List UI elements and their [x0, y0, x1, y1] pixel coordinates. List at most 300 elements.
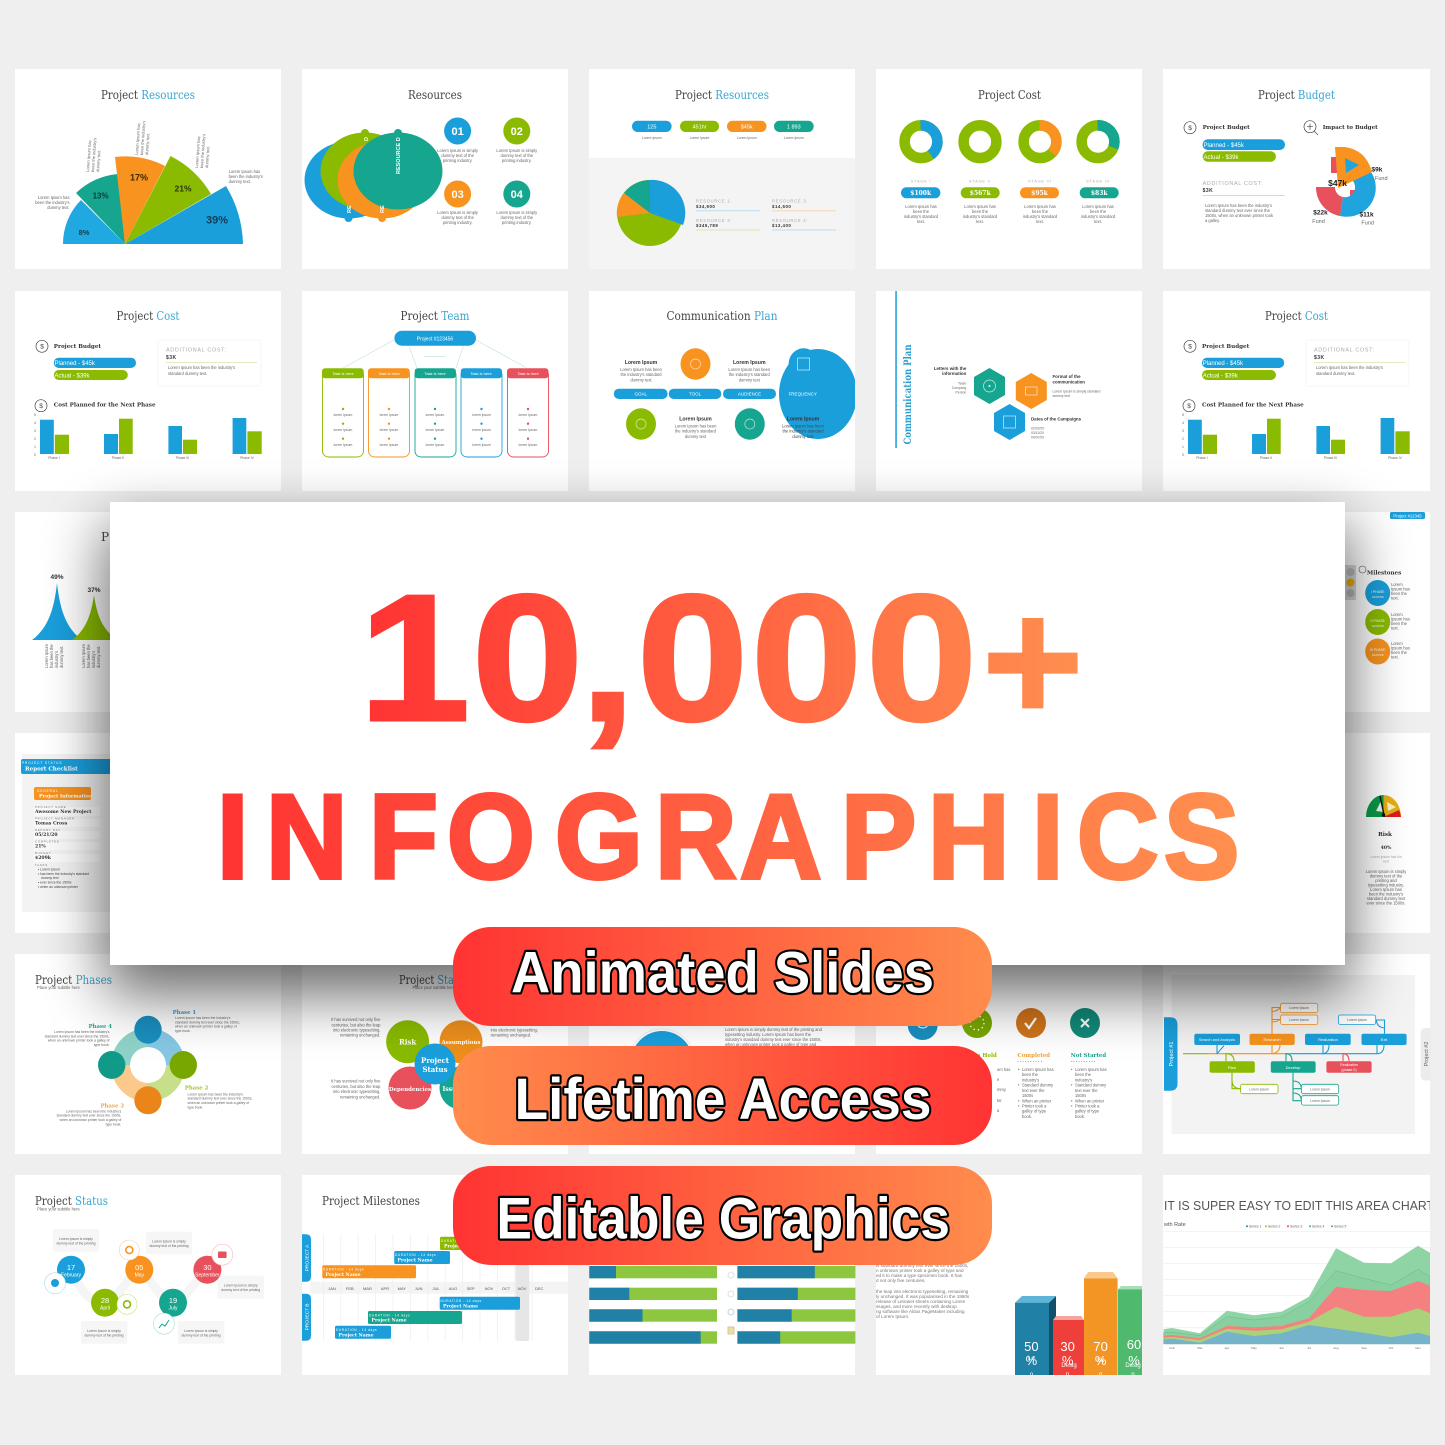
panel: project flow timeline slide — [1163, 954, 1431, 1154]
project information fields — [34, 805, 100, 889]
flow sub boxes — [1241, 1003, 1376, 1105]
resource figures: $14,500 — [772, 204, 791, 209]
body text, clipped at slide edge: ng software like Aldus PageMaker including — [876, 1309, 965, 1314]
month labels: JUL — [432, 1286, 440, 1291]
chart annotation labels: been the industry's — [90, 138, 97, 172]
date circles: 28 — [101, 1296, 109, 1305]
3d bars: n — [1131, 1372, 1135, 1378]
3d bars: Desig — [1125, 1363, 1141, 1369]
task columns: lorem Ipsum — [334, 413, 353, 417]
phase captions: type book. — [106, 1122, 121, 1126]
area chart: Jul — [1307, 1346, 1311, 1350]
date circles: 17 — [67, 1263, 75, 1272]
cost planned bar chart — [34, 400, 262, 460]
hexagon captions: 03/11/20 — [1031, 431, 1044, 435]
3d bars: % — [1095, 1353, 1107, 1368]
plan pills: TOOL — [689, 392, 702, 397]
hexagon captions: Team — [958, 382, 966, 386]
numbered items 01 to 04: dummy text of the — [441, 153, 475, 158]
chart annotation labels — [35, 121, 263, 210]
numbered items 01 to 04: printing industry. — [443, 158, 473, 163]
status column: completed: galley of type — [1022, 1109, 1047, 1114]
milestone phases: I PHASE — [1371, 590, 1385, 594]
flow stage boxes: Research — [1263, 1037, 1281, 1042]
plan labels: Lorem Ipsum has been — [620, 367, 663, 372]
polar area chart: 39% — [206, 214, 228, 226]
status icons — [908, 1008, 1100, 1040]
text cards: dummy text of the printing — [84, 1334, 124, 1338]
overlapping resource circles: D — [364, 137, 370, 141]
task columns: lorem Ipsum — [380, 428, 399, 432]
task columns: lorem Ipsum — [472, 443, 491, 447]
text cards: Lorem Ipsum is simply — [224, 1284, 258, 1288]
panel: project status bubbles slide — [302, 954, 568, 1154]
status paragraph: Lorem Ipsum is simply dummy text of the printing and — [725, 1027, 823, 1032]
date circles: February — [61, 1272, 81, 1278]
flow stage boxes: (phase II) — [1341, 1068, 1357, 1072]
panel: project phases slide — [15, 954, 281, 1154]
plan pills: GOAL — [634, 392, 647, 397]
project information fields: 05/21/20 — [35, 832, 58, 838]
peak chart — [32, 574, 118, 668]
heading: project cost: Project Cost — [978, 88, 1041, 102]
chart subtitle and legend: Series 2 — [1268, 1224, 1281, 1228]
impact to budget radial chart: Impact to Budget — [1323, 125, 1378, 131]
panel: project resources polar chart slide — [15, 69, 281, 269]
cost planned bar chart: 5 — [1182, 413, 1184, 417]
status column: completed: • — [1018, 1098, 1020, 1103]
panel: stacked progress bars slide — [589, 1175, 855, 1375]
chart annotation labels: Lorem Ipsum has — [229, 169, 260, 174]
risk labels: text — [1383, 860, 1389, 864]
status column: completed: 1500s — [1022, 1093, 1033, 1098]
task columns: Task is here — [517, 371, 539, 376]
additional cost card: standard dummy text. — [1316, 371, 1355, 376]
metric pills: 125 — [647, 124, 656, 130]
chart annotation labels: Lorem Ipsum has — [194, 136, 201, 168]
phase captions: Lorem Ipsum has been the industry's — [66, 1109, 122, 1113]
status bubbles: Project — [421, 1056, 450, 1065]
additional cost card: ADDITIONAL COST: — [166, 348, 227, 354]
project information fields: dummy text — [41, 876, 59, 880]
left progress bars — [589, 1266, 717, 1344]
resource figures: RESOURCE 1: — [696, 198, 732, 204]
area chart: Apr — [1225, 1346, 1229, 1350]
flow stage boxes: Search and Analysis — [1199, 1037, 1235, 1042]
milestone phases: Ipsum has — [1391, 646, 1410, 650]
project information fields: • Lorem Ipsum — [38, 868, 60, 872]
status paragraph: typesetting industry. Lorem Ipsum has been the — [725, 1032, 812, 1037]
chart subtitle and legend: wth Rate — [1163, 1222, 1186, 1228]
stage columns: text. — [917, 219, 925, 224]
status column: in progress — [974, 1053, 1010, 1113]
hexagon captions: Lorem Ipsum is simply standard — [1052, 390, 1100, 394]
impact to budget radial chart: Fund — [1375, 176, 1388, 182]
phase captions: Phase 1 — [173, 1010, 196, 1016]
date circles: May — [135, 1272, 145, 1278]
phase captions: when an unknown printer took a galley of — [60, 1118, 121, 1122]
plan labels: Lorem Ipsum — [625, 360, 658, 366]
stage columns: industry's standard — [1023, 214, 1058, 219]
hexagon captions: 02/02/20 — [1031, 426, 1044, 430]
polar area chart: 17% — [130, 172, 148, 182]
gantt bars: DURATION - 14 days — [395, 1253, 436, 1257]
3d bars: Desig — [1061, 1363, 1077, 1369]
status column: in progress: a — [997, 1108, 1000, 1113]
stage columns: Lorem Ipsum has — [1024, 204, 1056, 209]
panel: project cost bars slide — [15, 291, 281, 491]
stage columns: been the — [1032, 209, 1049, 214]
chart annotation labels: Lorem Ipsum has — [38, 195, 70, 200]
status column: not started: • — [1071, 1103, 1073, 1108]
month labels: MAY — [398, 1286, 406, 1291]
additional cost card: ADDITIONAL COST: — [1314, 348, 1375, 354]
task columns: lorem Ipsum — [426, 443, 445, 447]
panel: peaks chart slide, left slice — [15, 512, 135, 712]
metric pills — [632, 121, 814, 140]
impact to budget radial chart: $47k — [1328, 178, 1347, 188]
phase captions: Lorem Ipsum has been the industry's — [54, 1030, 110, 1034]
status text blocks: remaining unchanged. — [491, 1033, 531, 1038]
panel: peaks chart slide, left slice: P — [101, 530, 109, 544]
3d bars — [1015, 1272, 1142, 1378]
month labels: OCT — [502, 1286, 511, 1291]
status text blocks: centuries, but also the leap — [331, 1084, 381, 1089]
numbered items 01 to 04 — [437, 118, 538, 225]
feature pill: editable graphics — [453, 1166, 992, 1265]
status column: completed: • — [1018, 1103, 1020, 1108]
peak chart: dummy text. — [59, 646, 64, 668]
status column: completed: been the — [1022, 1072, 1039, 1077]
phase captions: Phase 3 — [100, 1104, 124, 1110]
metric pills: 1 893 — [787, 124, 801, 130]
month labels: NOV — [485, 1286, 494, 1291]
milestone phases: Ipsum has — [1391, 586, 1410, 592]
tab: project 1 — [1164, 1017, 1178, 1091]
status column: completed: • — [1018, 1083, 1020, 1088]
status column: in progress: mmy — [997, 1087, 1007, 1092]
panel: task status columns slide — [876, 954, 1142, 1154]
hexagon captions: 04/07/20 — [1031, 436, 1044, 440]
status column: not started: When an printer — [1075, 1098, 1105, 1103]
cost planned bar chart: Phase III — [1324, 456, 1337, 460]
chart subtitle and legend: Series 3 — [1290, 1224, 1303, 1228]
status text blocks — [331, 1017, 538, 1099]
numbered items 01 to 04: dummy text of the — [441, 215, 475, 220]
area chart: Aug — [1333, 1346, 1339, 1350]
org connectors — [343, 340, 527, 368]
stage columns: text. — [976, 219, 984, 224]
status column: not started: text ever the — [1075, 1088, 1098, 1093]
status column: in progress: e — [997, 1077, 1000, 1082]
donut charts — [905, 125, 1114, 158]
3d bars: % — [1062, 1353, 1074, 1368]
hexagon captions: Dates of the Campaigns — [1031, 416, 1082, 422]
status text blocks: It has survived not only five — [331, 1079, 381, 1084]
area chart: Jun — [1279, 1346, 1284, 1350]
task columns: lorem Ipsum — [426, 428, 445, 432]
3d bars: % — [1128, 1353, 1140, 1368]
panel: 3d bar chart slide — [876, 1175, 1142, 1378]
status column: in progress: um has — [997, 1067, 1010, 1072]
month labels: DEC — [535, 1286, 544, 1291]
task columns: lorem Ipsum — [426, 413, 445, 417]
task columns: Task is here — [424, 371, 446, 376]
milestone phases: Lorem — [1391, 641, 1403, 646]
stage columns: STAGE II — [969, 178, 991, 184]
stage columns: STAGE I — [911, 178, 931, 184]
stage columns: $83k — [1091, 190, 1108, 197]
status column: not started: 1500s — [1075, 1093, 1086, 1098]
milestone phases: 01/07/09 — [1372, 653, 1384, 657]
panel: communication plan hexagons slide — [876, 291, 1142, 491]
main headline card — [110, 502, 1345, 965]
plan labels: Lorem Ipsum has been — [675, 424, 717, 428]
hexagon captions: Company — [952, 386, 967, 390]
pie chart — [617, 180, 685, 246]
area chart — [1163, 1232, 1430, 1350]
report checklist header: Report Checklist — [25, 766, 78, 772]
project information fields: 21% — [35, 844, 46, 850]
cost planned bar chart: $ — [1187, 403, 1191, 410]
additional cost card: $3K — [166, 355, 177, 361]
body text, clipped at slide edge: the leap into electronic typesetting, remaining — [876, 1289, 969, 1294]
task columns: lorem Ipsum — [472, 428, 491, 432]
metric pills: Lorem Ipsum — [690, 136, 710, 140]
heading: project phases: Project Phases — [35, 973, 112, 987]
heading: resources: Resources — [408, 88, 462, 102]
project budget bars — [1184, 340, 1284, 380]
task columns: lorem Ipsum — [472, 413, 491, 417]
phase captions: type book. — [188, 1105, 203, 1109]
hexagon captions: communication — [1052, 380, 1085, 384]
budget bars and additional cost: Lorem Ipsum has been the industry's — [1205, 203, 1272, 208]
numbered items 01 to 04: 02 — [511, 126, 523, 138]
3d bars: % — [1026, 1353, 1038, 1368]
additional cost card: Lorem Ipsum has been the industry's — [168, 365, 235, 370]
milestone phases: text. — [1391, 626, 1399, 630]
heading: project milestones: Project Milestones — [322, 1194, 420, 1208]
status column: completed: Standard dummy — [1022, 1083, 1054, 1088]
row icons — [728, 1272, 734, 1334]
polar area chart: 8% — [79, 228, 90, 237]
3d bars: o — [1030, 1372, 1034, 1378]
vertical heading: Communication Plan — [903, 344, 914, 444]
area chart: Nov — [1415, 1346, 1421, 1350]
risk gauge — [1366, 795, 1401, 817]
impact to budget radial chart: Fund — [1361, 220, 1374, 226]
impact to budget radial chart: Fund — [1312, 219, 1325, 225]
budget bars and additional cost: standard dummy text ever since the — [1205, 208, 1271, 213]
text cards: Lorem Ipsum is simply — [152, 1240, 186, 1244]
project information fields: Tomas Cross — [35, 820, 68, 826]
impact to budget radial chart: $9k — [1372, 166, 1383, 174]
body text, clipped at slide edge: d not only five centuries, — [876, 1278, 926, 1283]
plan labels — [620, 360, 825, 439]
month labels: JAN — [328, 1286, 336, 1291]
area chart: Oct — [1389, 1346, 1393, 1350]
milestones heading: Milestones — [1367, 570, 1401, 576]
plan labels: Lorem Ipsum has been — [728, 367, 771, 372]
cost planned bar chart: 4 — [1182, 421, 1184, 425]
status paragraph: industry's standard dummy text ever since the 1500s, — [725, 1037, 822, 1042]
gantt bars: Project Name — [398, 1258, 433, 1264]
status column: in progress: In Hold — [974, 1053, 997, 1059]
milestone phases: III PHASE — [1370, 648, 1386, 652]
risk labels — [1366, 832, 1407, 906]
additional cost card — [1306, 340, 1409, 386]
status column: not started: Not Started — [1071, 1053, 1106, 1059]
side navigation dots — [1345, 565, 1356, 600]
status bubbles: Risk — [399, 1038, 416, 1046]
heading: project status: Project Status — [35, 1194, 108, 1208]
task columns: lorem Ipsum — [519, 413, 538, 417]
area chart: Feb — [1169, 1346, 1175, 1350]
gantt bars: DURATION - 14 days — [369, 1313, 410, 1317]
cost planned bar chart: Phase II — [112, 456, 124, 460]
body text, clipped at slide edge: ed it to make a type specimen book. It has — [876, 1273, 963, 1278]
stage columns: text. — [1036, 219, 1044, 224]
project information fields: BUDGET — [35, 851, 51, 855]
budget bars and additional cost: Actual - $39k — [1204, 155, 1240, 161]
cost planned bar chart: Phase I — [48, 456, 60, 460]
milestone phases: 01/07/09 — [1372, 624, 1384, 628]
polar area chart — [63, 156, 243, 244]
task columns: Task is here — [470, 371, 492, 376]
date circles: April — [100, 1306, 110, 1312]
flow stage boxes — [1194, 1034, 1407, 1073]
numbered items 01 to 04: 01 — [451, 126, 464, 138]
peak chart: 49% — [50, 574, 64, 581]
milestone phases: text. — [1391, 596, 1399, 600]
resource figures — [696, 198, 836, 230]
status column: completed: Completed — [1018, 1053, 1050, 1059]
phase captions: Lorem Ipsum has been the industry's — [188, 1092, 243, 1096]
flow sub boxes: Lorem Ipsum — [1347, 1018, 1367, 1022]
peak chart: dummy text. — [96, 646, 101, 668]
flow connectors — [1183, 1008, 1384, 1101]
date circles — [57, 1256, 221, 1317]
status bubbles: Issues — [442, 1086, 464, 1093]
3d bars: 70 — [1093, 1339, 1108, 1354]
cost planned bar chart: 3 — [1182, 429, 1184, 433]
numbered items 01 to 04: printing industry. — [502, 158, 532, 163]
numbered items 01 to 04: dummy text of the — [501, 153, 534, 158]
status text blocks: into electronic typesetting, — [333, 1028, 380, 1032]
hexagon captions: information — [942, 371, 967, 376]
phase captions: type book. — [175, 1029, 191, 1033]
stage columns: industry's standard — [963, 214, 998, 219]
project information fields: • when an unknown printer — [38, 885, 79, 889]
resource figures: $34,900 — [696, 204, 715, 209]
numbered items 01 to 04: Lorem Ipsum is simply — [496, 210, 538, 215]
feature pill: lifetime access — [453, 1046, 992, 1145]
task columns: lorem Ipsum — [519, 428, 538, 432]
gantt bars: Project Name — [372, 1318, 407, 1324]
month labels: FEB — [346, 1286, 354, 1291]
project information tag: Project Information — [39, 794, 93, 800]
budget bars and additional cost: $ — [1188, 125, 1192, 132]
headline word: INFOGRAPHICS: INFOGRAPHICS — [217, 770, 1239, 904]
status bubbles: Status — [422, 1065, 448, 1074]
chart annotation labels: dummy text. — [229, 179, 251, 184]
month labels: APR — [381, 1286, 389, 1291]
tab: project 1: Project #1 — [1169, 1042, 1175, 1066]
numbered items 01 to 04: printing industry. — [443, 220, 473, 225]
chart subtitle and legend: Series 5 — [1334, 1224, 1347, 1228]
status column: completed: Lorem Ipsum has — [1022, 1067, 1054, 1072]
flow stage boxes: Realization — [1340, 1063, 1358, 1067]
cost planned bar chart: Phase I — [1196, 456, 1208, 460]
cost planned bar chart: 0 — [34, 453, 36, 457]
date circles: 19 — [169, 1296, 177, 1305]
panel: project cost bars slide, second copy — [1163, 291, 1430, 491]
peak chart: Lorem Ipsum — [81, 644, 86, 668]
hexagon captions: Letters with the — [934, 366, 967, 371]
project information fields: • has been the industry's standard — [38, 872, 89, 876]
3d bars: o — [1099, 1372, 1103, 1378]
risk labels: Lorem Ipsum is simply — [1366, 869, 1407, 874]
flow stage boxes: Realization — [1318, 1037, 1338, 1042]
month labels: AUG — [449, 1286, 457, 1291]
flow stage boxes: Plan — [1228, 1065, 1236, 1070]
numbered items 01 to 04: 03 — [451, 189, 464, 201]
additional cost card: $3K — [1314, 355, 1325, 361]
numbered items 01 to 04: dummy text of the — [501, 215, 534, 220]
metric pills: Lorem Ipsum — [737, 136, 757, 140]
resource figures: RESOURCE 2: — [696, 218, 732, 223]
flow sub boxes: Lorem Ipsum — [1289, 1006, 1309, 1010]
cost planned bar chart: 2 — [34, 437, 36, 441]
phase captions: when an unknown printer took a galley of — [188, 1101, 249, 1105]
peak chart: industry's — [91, 651, 96, 668]
feature pill: editable graphics: Editable Graphics — [496, 1186, 950, 1251]
heading: area chart: IT IS SUPER EASY TO EDIT THIS AREA CHART — [1164, 1199, 1434, 1213]
phase ring diagram — [98, 1016, 197, 1114]
plan labels: dummy text — [685, 434, 707, 439]
flow stage boxes: Exit — [1381, 1037, 1388, 1042]
panel: area chart slide — [1163, 1175, 1434, 1375]
chart annotation labels: been the industry's — [199, 134, 206, 168]
body text, clipped at slide edge: of Lorem Ipsum. — [876, 1314, 909, 1319]
chart annotation labels: Lorem Ipsum has — [134, 123, 141, 155]
text cards: dummy text of the printing — [56, 1242, 96, 1246]
status text blocks: into electronic typesetting, — [491, 1028, 538, 1032]
status text blocks: It has survived not only five — [331, 1017, 381, 1022]
stage columns: been the — [1090, 209, 1107, 214]
status column: not started: • — [1071, 1083, 1073, 1088]
status column: completed — [1018, 1053, 1054, 1119]
chart subtitle and legend: Series 4 — [1312, 1224, 1325, 1228]
chart annotation labels: dummy text. — [47, 205, 70, 210]
project number tag — [1390, 512, 1425, 519]
3d bars: n — [1066, 1372, 1069, 1378]
flow sub boxes: Lorem Ipsum — [1310, 1099, 1330, 1103]
project budget bars: Planned - $45k — [1203, 361, 1244, 367]
plan labels: the industry's standard — [729, 372, 771, 377]
status column: not started: Standard dummy — [1075, 1083, 1107, 1088]
text cards: dummy text of the printing — [149, 1244, 189, 1248]
risk labels: ever since the 1500s. — [1367, 900, 1405, 906]
phase captions: standard dummy text ever since the 1500s, — [56, 1114, 121, 1118]
body text, clipped at slide edge — [876, 1263, 970, 1319]
gantt bars — [322, 1237, 520, 1339]
status column: not started: industry's — [1075, 1077, 1092, 1082]
heading: project status: Project Status — [399, 973, 469, 987]
milestones heading — [1359, 566, 1401, 576]
chart annotation labels: dummy text. — [95, 149, 102, 172]
task columns: lorem Ipsum — [380, 413, 399, 417]
